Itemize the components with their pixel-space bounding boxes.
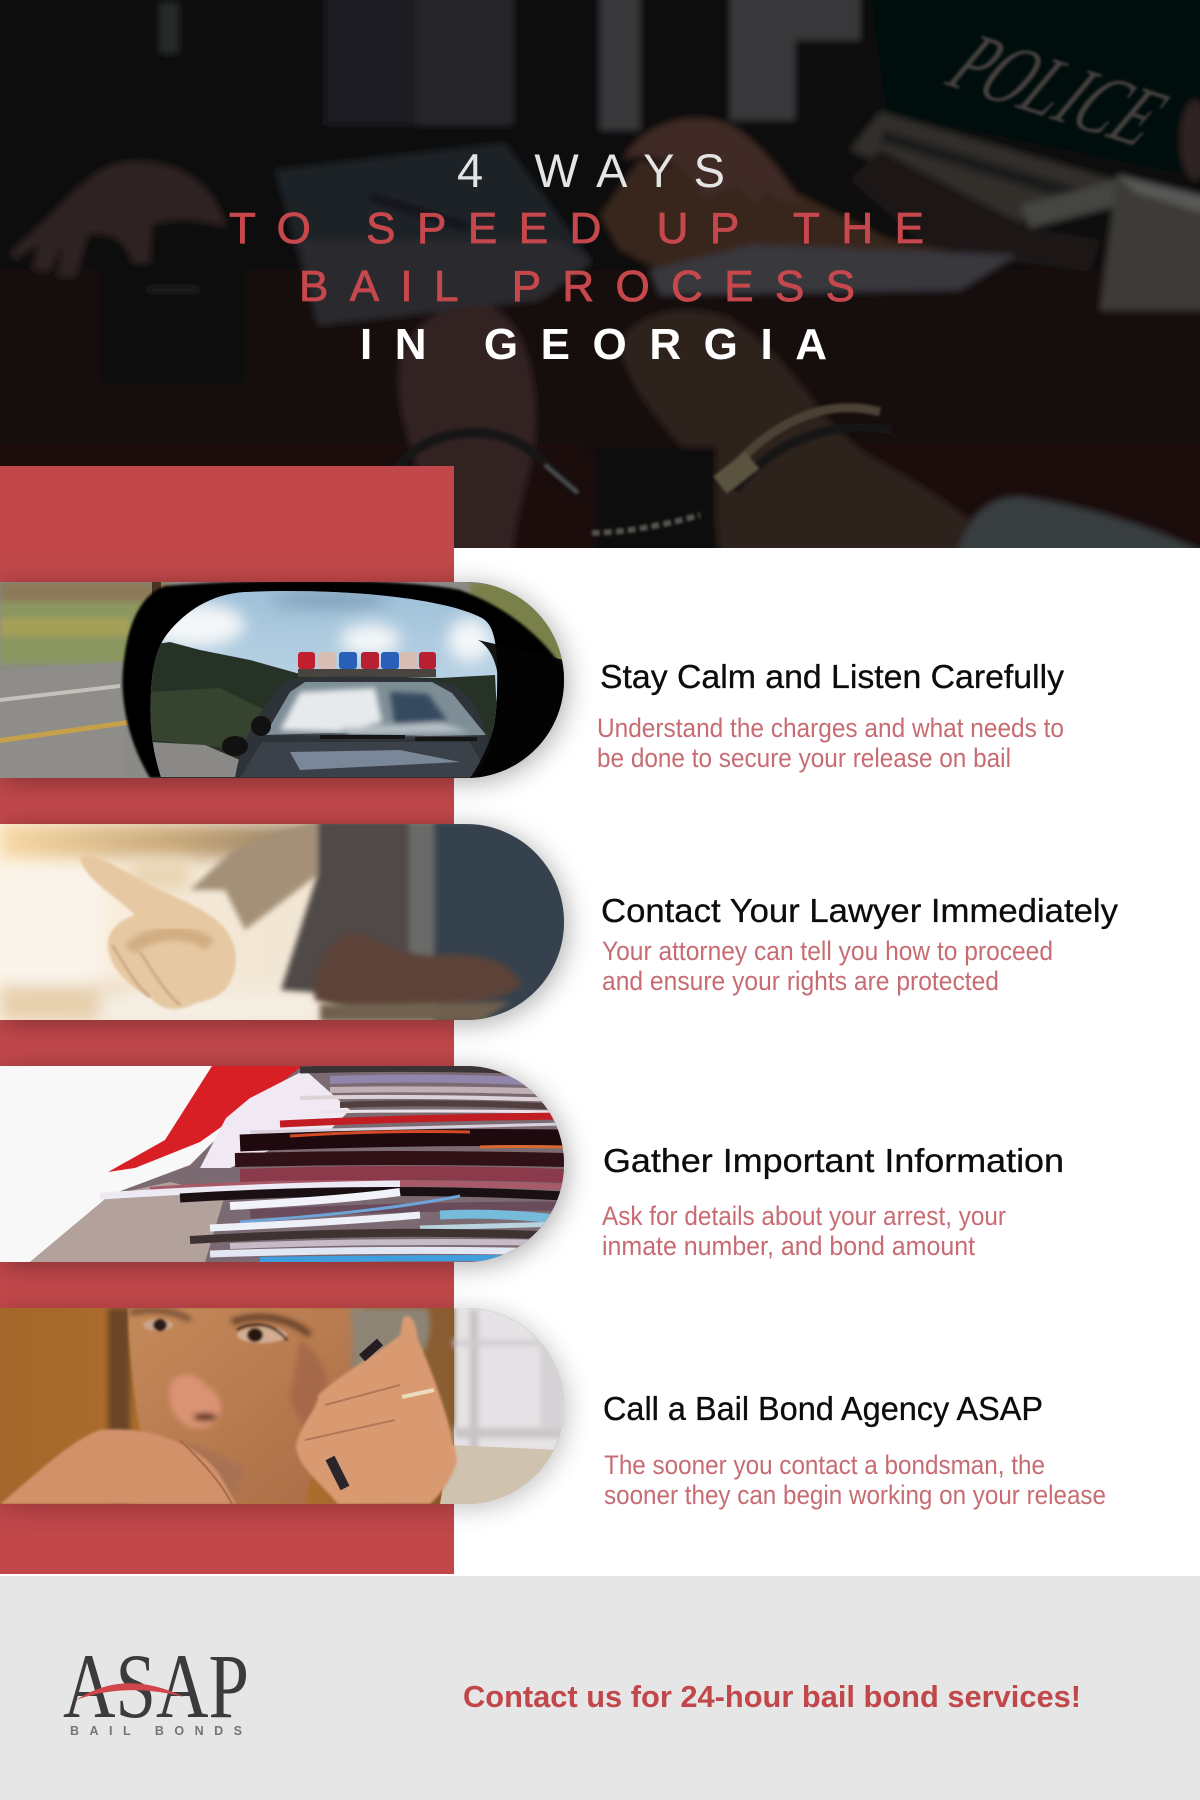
step 4 text: sooner they can begin working on your release bbox=[604, 1480, 1106, 1510]
red vertical band bbox=[0, 466, 454, 1574]
pill image 4: man calling on phone bbox=[0, 1308, 564, 1504]
step 1 text: Stay Calm and Listen Carefully bbox=[600, 658, 1065, 695]
call to action: Contact us for 24-hour bail bond services! bbox=[463, 1679, 1081, 1714]
hero photo: handcuffed hands at police desk bbox=[0, 0, 1200, 600]
pill image 3: stack of paper files bbox=[0, 1066, 564, 1262]
pill image 2: outstretched hand of lawyer bbox=[0, 820, 574, 1025]
handcuffs bbox=[395, 408, 892, 533]
step 3 text: Ask for details about your arrest, your bbox=[602, 1201, 1006, 1231]
step 1 text: be done to secure your release on bail bbox=[597, 743, 1011, 773]
title: IN GEORGIA bbox=[360, 320, 827, 369]
title: TO SPEED UP THE bbox=[229, 204, 924, 253]
step 4 text: Call a Bail Bond Agency ASAP bbox=[603, 1390, 1043, 1427]
step 2 text: and ensure your rights are protected bbox=[602, 966, 999, 996]
step 2 text: Contact Your Lawyer Immediately bbox=[601, 892, 1119, 929]
step 2 text: Your attorney can tell you how to proceed bbox=[602, 936, 1053, 966]
step 4 text bbox=[603, 1390, 1106, 1510]
title bbox=[229, 144, 924, 369]
logo: ASAP Bail Bonds: BAIL BONDS bbox=[70, 1724, 242, 1738]
logo: ASAP Bail Bonds: ASAP bbox=[63, 1635, 249, 1737]
step 3 text: Gather Important Information bbox=[603, 1142, 1064, 1179]
step 4 text: The sooner you contact a bondsman, the bbox=[604, 1450, 1045, 1480]
pill image 1: police car in side mirror bbox=[0, 580, 564, 780]
police car bbox=[222, 676, 490, 778]
title: 4 WAYS bbox=[457, 144, 725, 197]
step 1 text: Understand the charges and what needs to bbox=[597, 713, 1064, 743]
light bar bbox=[298, 652, 436, 677]
title: BAIL PROCESS bbox=[299, 262, 855, 311]
step 3 text bbox=[602, 1142, 1064, 1261]
step 3 text: inmate number, and bond amount bbox=[602, 1231, 976, 1261]
footer background bbox=[0, 1576, 1200, 1800]
step 2 text bbox=[601, 892, 1119, 996]
step 1 text bbox=[597, 658, 1065, 773]
